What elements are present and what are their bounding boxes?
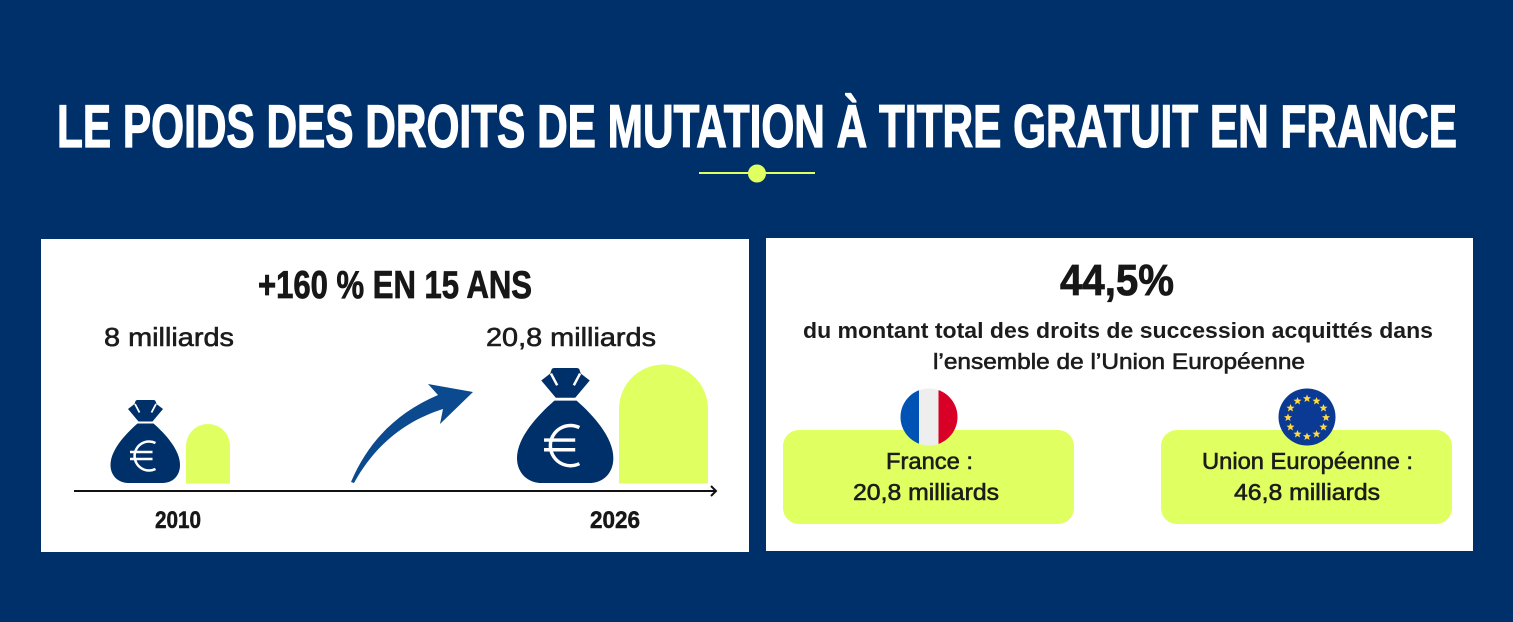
key figure: 44,5%: 44,5% (1060, 256, 1174, 305)
label: 2026: 2026 (590, 507, 640, 534)
card: France (783, 388, 1074, 524)
EU label: Union Européenne : (1202, 448, 1413, 474)
panel heading: +160 %: +160 % EN 15 ANS (258, 264, 532, 307)
icon: small money bag (110, 400, 180, 483)
card: European Union (1161, 388, 1452, 524)
EU amount: 46,8 milliards (1234, 479, 1380, 505)
icon: French flag (900, 388, 958, 446)
panel: share of EU (766, 238, 1473, 551)
label: 8 milliards: 8 milliards (104, 322, 234, 352)
panel: growth over 15 years (41, 239, 749, 552)
arrow: growth (351, 384, 473, 483)
label: 20,8 milliards: 20,8 milliards (486, 322, 656, 352)
icon: large money bag (517, 368, 613, 483)
description text: du montant total des droits de succession acquittés dans (803, 318, 1433, 343)
description text: l’ensemble de l’Union Européenne (933, 349, 1305, 374)
icon: EU flag (1278, 388, 1336, 446)
France amount: 20,8 milliards (853, 479, 999, 505)
bar: 2026 (619, 364, 708, 484)
infographic canvas (41, 92, 1473, 552)
bar: 2010 (186, 424, 230, 484)
France label: France : (886, 448, 973, 474)
label: 2010: 2010 (155, 507, 201, 534)
description text (803, 318, 1433, 374)
timeline axis (74, 486, 716, 496)
title ornament (699, 164, 815, 182)
